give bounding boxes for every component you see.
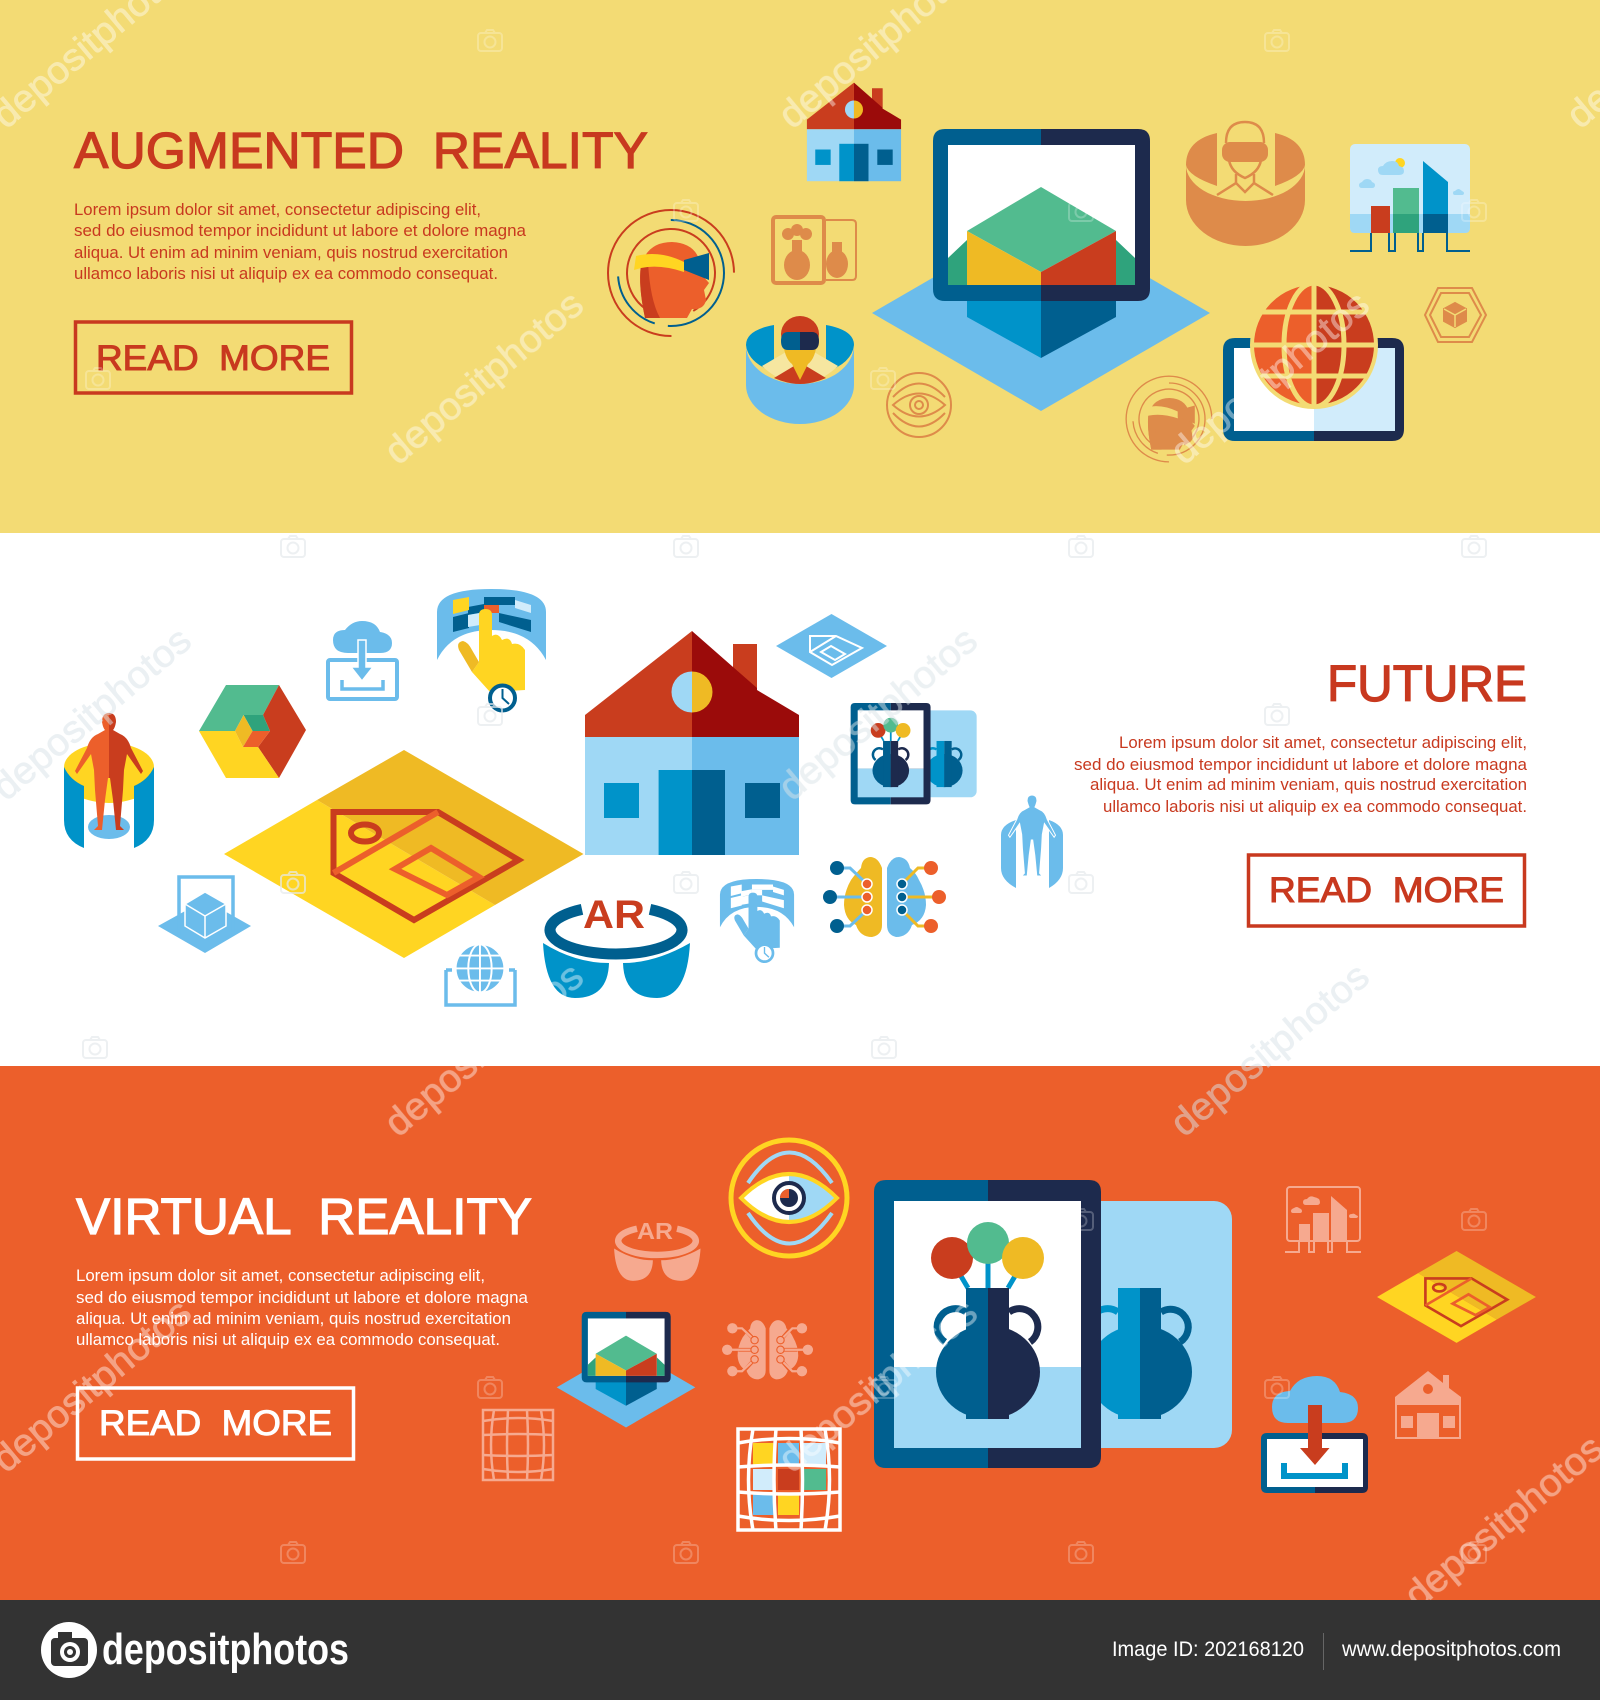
watermarks: depositphotos [1397, 1427, 1600, 1617]
watermarks: depositphotos [771, 1291, 985, 1481]
text block: future description: aliqua. Ut enim ad minim veniam, quis nostrud exercitation [1090, 775, 1527, 794]
panel: future [0, 533, 1600, 1066]
heading: virtual reality: VIRTUAL REALITY [76, 1188, 532, 1245]
button: read more [76, 322, 352, 393]
button: read more [1248, 855, 1524, 926]
icon: small yellow diamond with house tag [1377, 1251, 1536, 1343]
icon: small house [807, 83, 901, 181]
icon: human body in blue cylinder [1001, 795, 1063, 888]
icon: chart card [1350, 144, 1470, 251]
watermark cameras [83, 30, 1486, 1563]
icon: head with vr headset in rings [608, 210, 734, 336]
panel: virtual reality [0, 1066, 1600, 1600]
icon: pale chart [1285, 1187, 1361, 1252]
icon: eye in rings [887, 373, 951, 437]
text block: virtual reality description [76, 1266, 529, 1349]
icon: person in blue cylinder [746, 316, 854, 424]
text block: augmented reality description [74, 200, 527, 283]
button: read more [78, 1388, 354, 1459]
icon: person in orange cylinder [1186, 122, 1305, 246]
icon: globe on frame [446, 943, 515, 1005]
logo: depositphotos [41, 1622, 349, 1678]
icon: cloud download on tablet [1261, 1376, 1368, 1493]
icon: small hand touching panel [720, 879, 794, 962]
icon: pale house [1395, 1371, 1461, 1439]
icon: tablet with cube [872, 129, 1210, 411]
icon: eye in rings [731, 1140, 847, 1256]
text block: virtual reality description: ullamco laboris nisi ut aliquip ex ea commodo consequat. [76, 1330, 500, 1349]
icon: yellow diamond with house tag [224, 750, 584, 958]
text block: virtual reality description: Lorem ipsum dolor sit amet, consectetur adipiscing elit, [76, 1266, 485, 1285]
watermarks: depositphotos [377, 283, 591, 473]
icon: cube on frame [158, 877, 251, 953]
icon: head with headset outline in rings [1126, 376, 1212, 462]
icon: blue diamond with house tag [776, 614, 887, 678]
icon: vase frames [773, 217, 856, 283]
text block: future description: Lorem ipsum dolor sit amet, consectetur adipiscing elit, [1119, 733, 1527, 752]
icon: tablet with globe [1223, 280, 1404, 441]
icon: human body in yellow cylinder [64, 713, 154, 848]
heading: future: FUTURE [1327, 655, 1527, 712]
icon: hexagonal cube [199, 685, 306, 778]
icon: hand touching curved panel [437, 589, 546, 710]
icon: cube outline [1425, 288, 1486, 342]
icon: large tablet with vase [874, 1180, 1232, 1468]
icon: ar glasses [543, 893, 690, 998]
icon: warped grid with colour tiles [738, 1429, 840, 1530]
heading: augmented reality: AUGMENTED REALITY [74, 122, 648, 179]
icon: large house [585, 631, 799, 855]
icon: mini tablet with cube [557, 1312, 695, 1428]
text block: future description [1074, 733, 1528, 816]
button: read more: READ MORE [96, 339, 330, 378]
icon: cloud download [328, 621, 397, 699]
footer bar [0, 1600, 1600, 1700]
text block: augmented reality description: aliqua. Ut enim ad minim veniam, quis nostrud exercitation [74, 243, 508, 262]
icon: ar glasses: AR [583, 893, 645, 937]
text block: augmented reality description: ullamco laboris nisi ut aliquip ex ea commodo consequat. [74, 264, 498, 283]
icon: brain network [823, 857, 946, 937]
icon: pale warped grid [483, 1410, 553, 1480]
button: read more: READ MORE [1269, 871, 1504, 910]
icon: pale ar glasses: AR [637, 1218, 673, 1244]
text block: virtual reality description: aliqua. Ut enim ad minim veniam, quis nostrud exercitation [76, 1309, 511, 1328]
watermarks: depositphotos [377, 955, 591, 1145]
watermarks: depositphotos [771, 619, 985, 809]
text block: future description: sed do eiusmod tempor incididunt ut labore et dolore magna [1074, 755, 1528, 774]
text block: future description: ullamco laboris nisi ut aliquip ex ea commodo consequat. [1103, 797, 1527, 816]
text block: augmented reality description: Lorem ipsum dolor sit amet, consectetur adipiscing elit, [74, 200, 481, 219]
logo: depositphotos: depositphotos [102, 1625, 349, 1674]
panel: augmented reality [0, 0, 1600, 533]
watermarks: depositphotos [1163, 283, 1377, 473]
icon: tablet with vase [851, 703, 977, 804]
text block: virtual reality description: sed do eiusmod tempor incididunt ut labore et dolore magna [76, 1288, 529, 1307]
icon: pale ar glasses [614, 1218, 701, 1281]
icon: pale brain [722, 1320, 813, 1379]
watermarks: depositphotos [1163, 955, 1377, 1145]
button: read more: READ MORE [99, 1404, 332, 1443]
website: www.depositphotos.com [1341, 1638, 1561, 1661]
text block: augmented reality description: sed do eiusmod tempor incididunt ut labore et dolore magna [74, 221, 527, 240]
image id: Image ID: 202168120 [1112, 1638, 1304, 1661]
